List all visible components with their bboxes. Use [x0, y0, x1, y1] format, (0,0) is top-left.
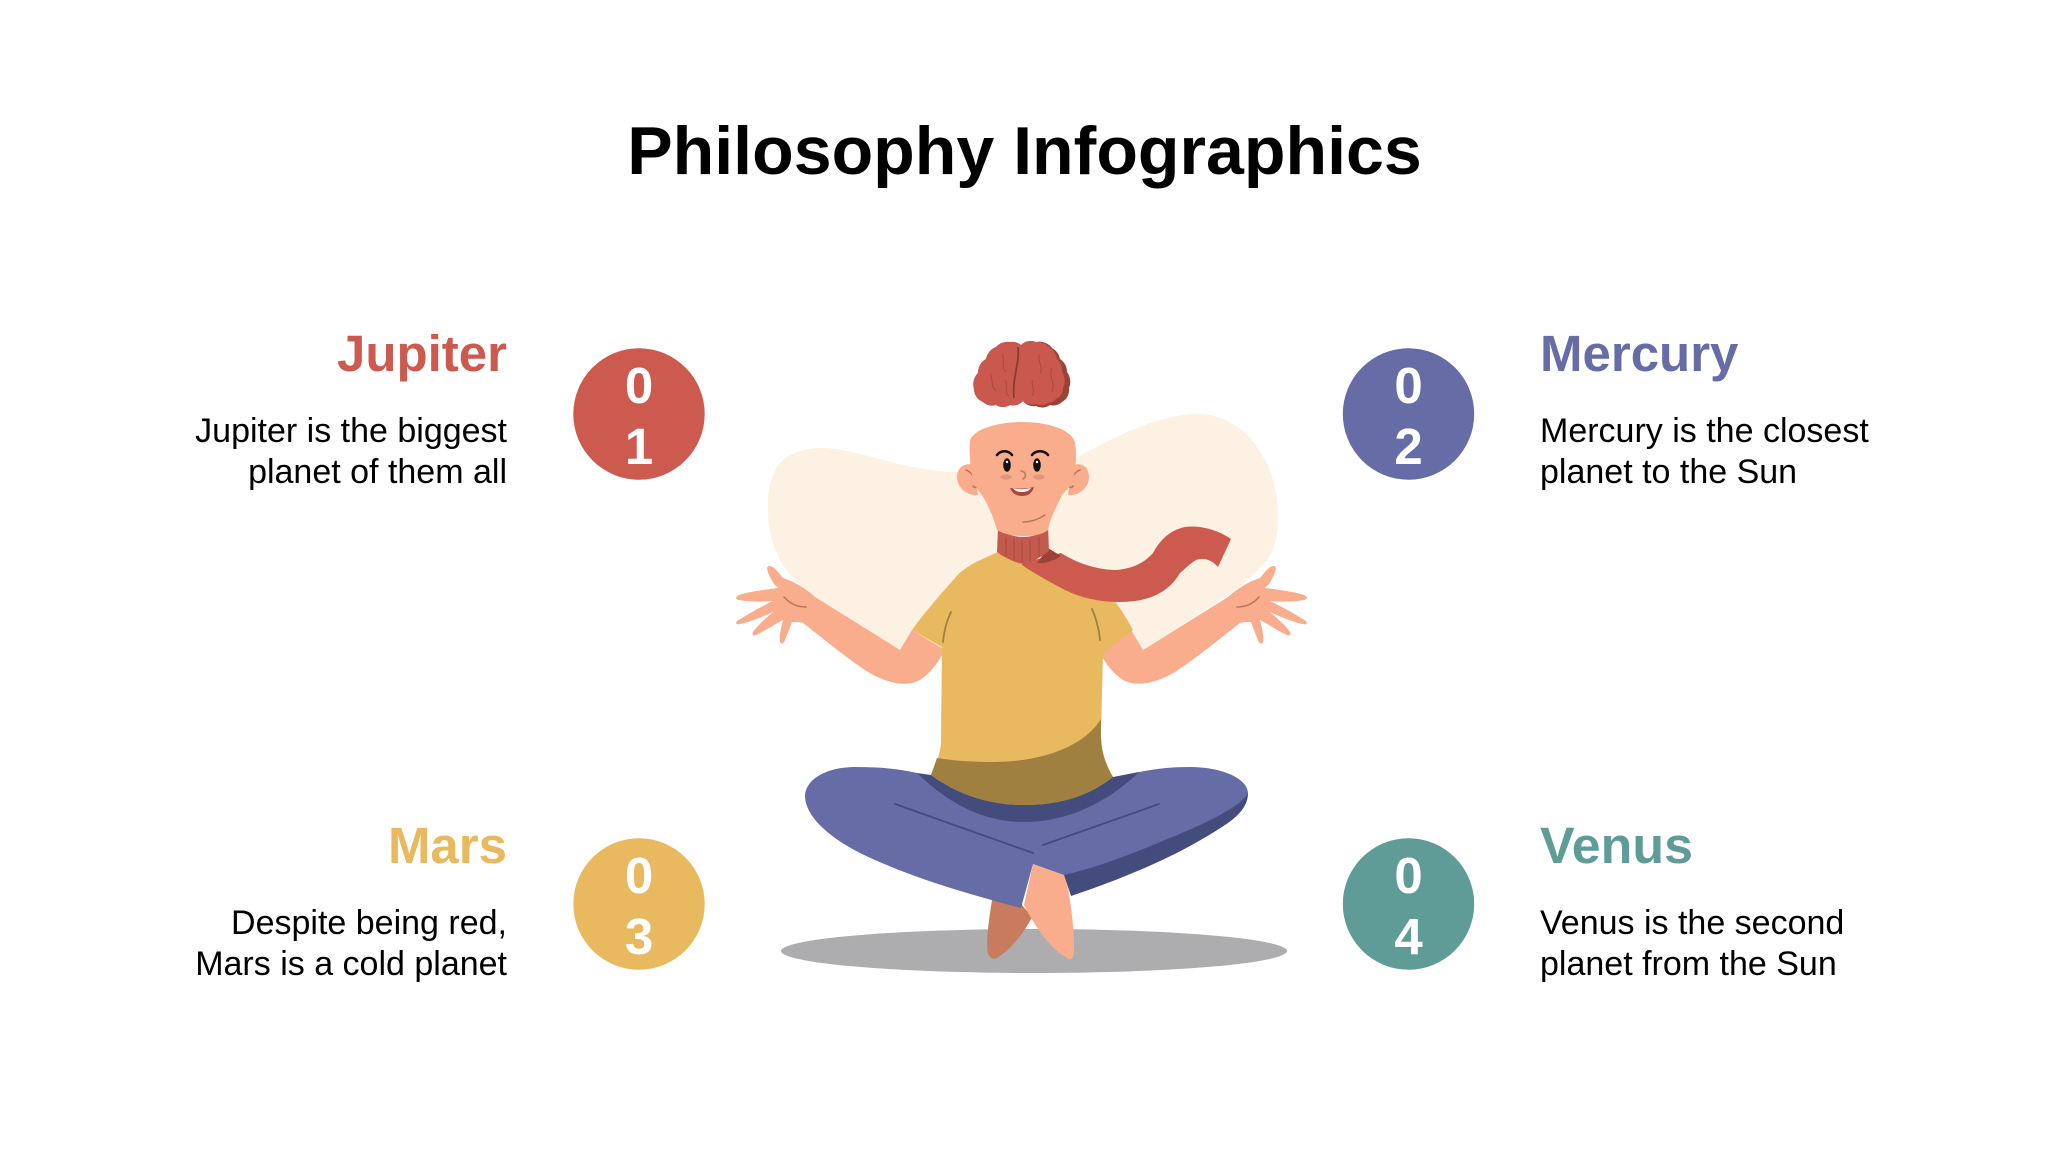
heading: Mars: Mars [388, 817, 507, 874]
number badge 03: 3 [625, 908, 653, 965]
background blob [768, 414, 1278, 650]
number badge 02: 0 [1394, 357, 1423, 414]
panel: 02 Mercury [1343, 325, 1869, 491]
text: Mercury description: planet to the Sun [1540, 453, 1797, 491]
text: Venus description: Venus is the second [1540, 904, 1844, 942]
text: Mars description: Despite being red, [231, 904, 507, 942]
nose [1021, 471, 1025, 479]
right arm and hand [1098, 566, 1307, 684]
text: Venus description: planet from the Sun [1540, 945, 1837, 983]
heading: Jupiter: Jupiter [337, 325, 507, 382]
yellow shirt [912, 552, 1133, 805]
red scarf [1022, 527, 1231, 602]
neck line [1023, 515, 1045, 522]
feet [987, 864, 1074, 959]
number badge 03: 0 [625, 847, 653, 904]
number badge 04: 4 [1394, 908, 1423, 965]
icon: brain [973, 341, 1070, 408]
text: Jupiter description: Jupiter is the biggest [195, 412, 508, 450]
eyes [1003, 458, 1011, 472]
number badge 02 [1343, 348, 1474, 480]
number badge 01 [573, 348, 705, 480]
panel: 01 Jupiter [195, 325, 705, 491]
heading: Venus: Venus [1540, 817, 1693, 874]
ground shadow [781, 929, 1287, 973]
title: Philosophy Infographics [627, 113, 1422, 189]
cheeks [1000, 474, 1012, 480]
number badge 01: 0 [625, 357, 653, 414]
text: Jupiter description: planet of them all [248, 453, 507, 491]
mouth [1010, 487, 1034, 496]
panel: 04 Venus [1343, 817, 1844, 983]
head [957, 422, 1089, 536]
illustration: meditating philosopher [736, 341, 1307, 973]
number badge 02: 2 [1394, 418, 1423, 475]
left arm and hand [736, 566, 945, 684]
text: Mercury description: Mercury is the closest [1540, 412, 1869, 450]
trousers [805, 767, 1248, 908]
turtleneck collar [997, 526, 1061, 564]
number badge 03 [573, 838, 705, 970]
heading: Mercury: Mercury [1540, 325, 1739, 382]
face shape [970, 422, 1076, 536]
number badge 01: 1 [625, 418, 653, 475]
number badge 04 [1343, 838, 1474, 970]
panel: 03 Mars [195, 817, 705, 983]
number badge 04: 0 [1394, 847, 1423, 904]
ears [957, 464, 978, 495]
text: Mars description: Mars is a cold planet [195, 945, 508, 983]
eyebrows [997, 451, 1048, 455]
